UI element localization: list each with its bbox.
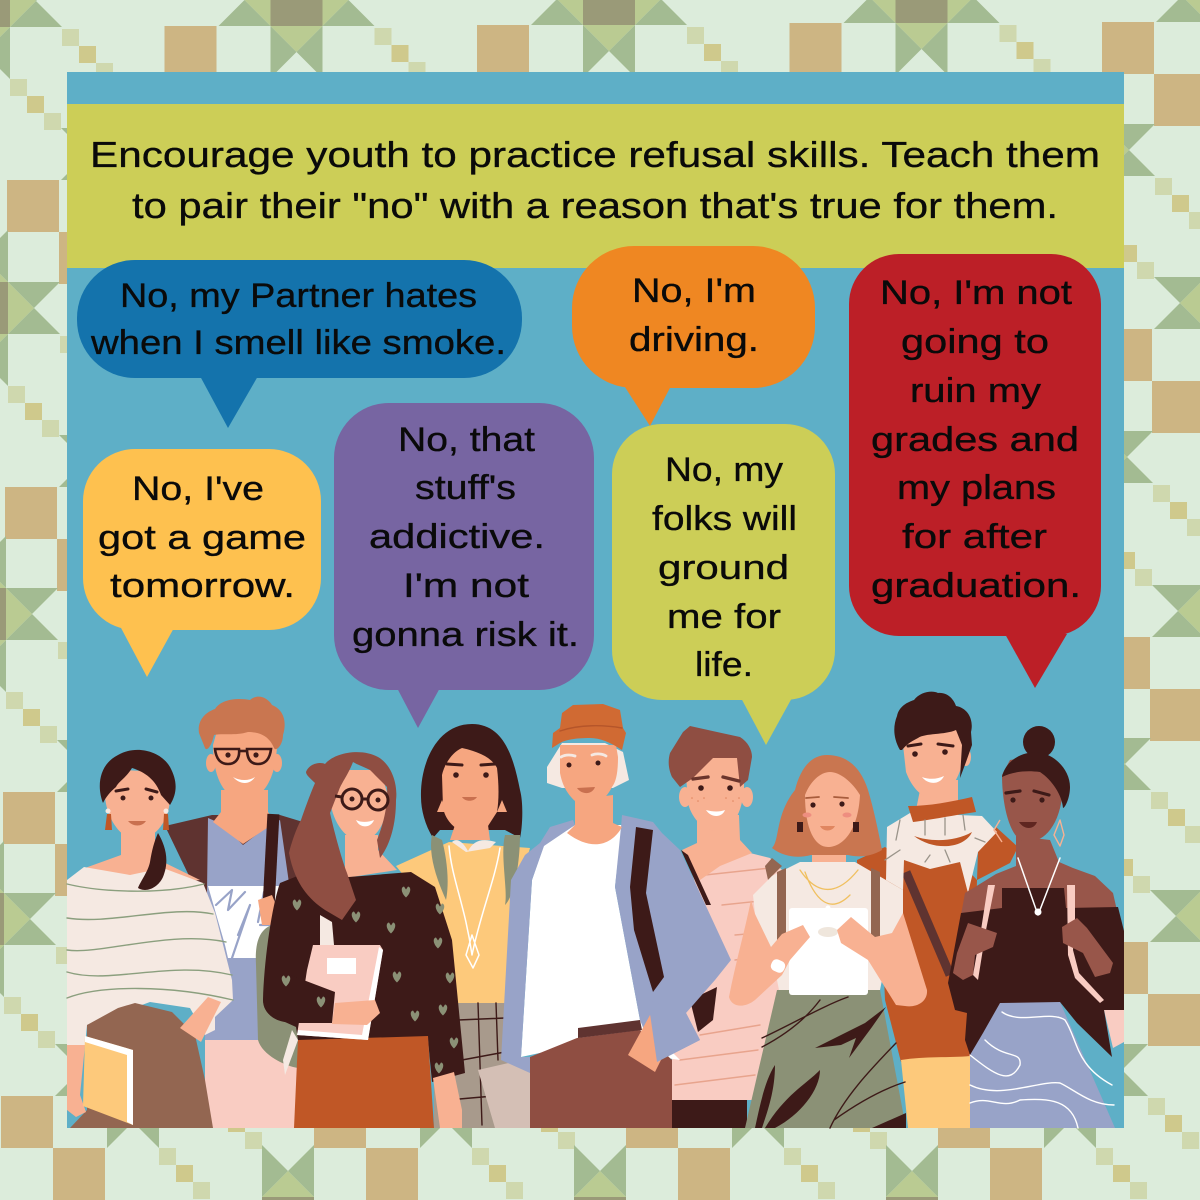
backpack of student 3 [256, 925, 310, 1068]
headline text: to pair their "no" with a reason that's true for them. [132, 185, 1058, 226]
speech bubble: orange: driving. [629, 321, 759, 359]
headline text: Encourage youth to practice refusal skills. Teach them [90, 134, 1100, 175]
speech bubble: red: ruin my [910, 372, 1041, 410]
speech bubble: blue: No, my Partner hates [120, 277, 477, 315]
speech bubble: olive: ground [658, 549, 789, 587]
speech bubble: olive: me for [667, 598, 781, 636]
speech bubble: blue [77, 260, 522, 428]
panel: blue background [67, 72, 1124, 1128]
grey tablet [478, 1058, 530, 1128]
student 6: freckled man [669, 726, 790, 1128]
speech bubble: purple: addictive. [369, 518, 545, 556]
speech bubble: blue: when I smell like smoke. [90, 324, 506, 362]
student 8: man with scarf [857, 692, 1018, 1128]
student 5: man in beanie [501, 704, 731, 1128]
speech bubble: orange [572, 246, 815, 426]
speech bubble: purple [334, 403, 594, 728]
student 1: woman in striped sweater [67, 750, 233, 1128]
speech bubble: olive: life. [695, 646, 753, 684]
speech bubble: yellow: No, I've [132, 470, 264, 508]
speech bubble: red: going to [901, 323, 1049, 361]
student 3: woman with long hair and notebook [263, 752, 465, 1128]
headline text [90, 134, 1100, 226]
banner: headline [67, 104, 1124, 268]
speech bubble: olive [612, 424, 835, 745]
speech bubble: red: graduation. [871, 567, 1081, 605]
speech bubble: purple: I'm not [403, 567, 530, 605]
speech bubble: red: grades and [871, 421, 1079, 459]
speech bubble: yellow: got a game [98, 519, 306, 557]
speech bubble: red: my plans [897, 469, 1056, 507]
speech bubble: olive: folks will [652, 500, 797, 538]
speech bubble: yellow [83, 449, 321, 677]
group of nine students [67, 692, 1124, 1128]
speech bubble: purple: gonna risk it. [352, 616, 579, 654]
student 4: woman with braids [396, 724, 530, 1128]
speech bubble: yellow: tomorrow. [110, 567, 295, 605]
student 9: woman with hair bun [948, 726, 1124, 1128]
speech bubble: olive: No, my [665, 451, 783, 489]
student 7: woman holding tablet [729, 755, 927, 1128]
student 2: man with glasses [165, 697, 303, 1128]
speech bubble: purple: No, that [398, 421, 536, 459]
speech bubble: red: No, I'm not [880, 274, 1073, 312]
speech bubble: red: for after [902, 518, 1047, 556]
speech bubble: purple: stuff's [415, 469, 516, 507]
speech bubble: red [849, 254, 1101, 688]
speech bubble: orange: No, I'm [632, 272, 756, 310]
